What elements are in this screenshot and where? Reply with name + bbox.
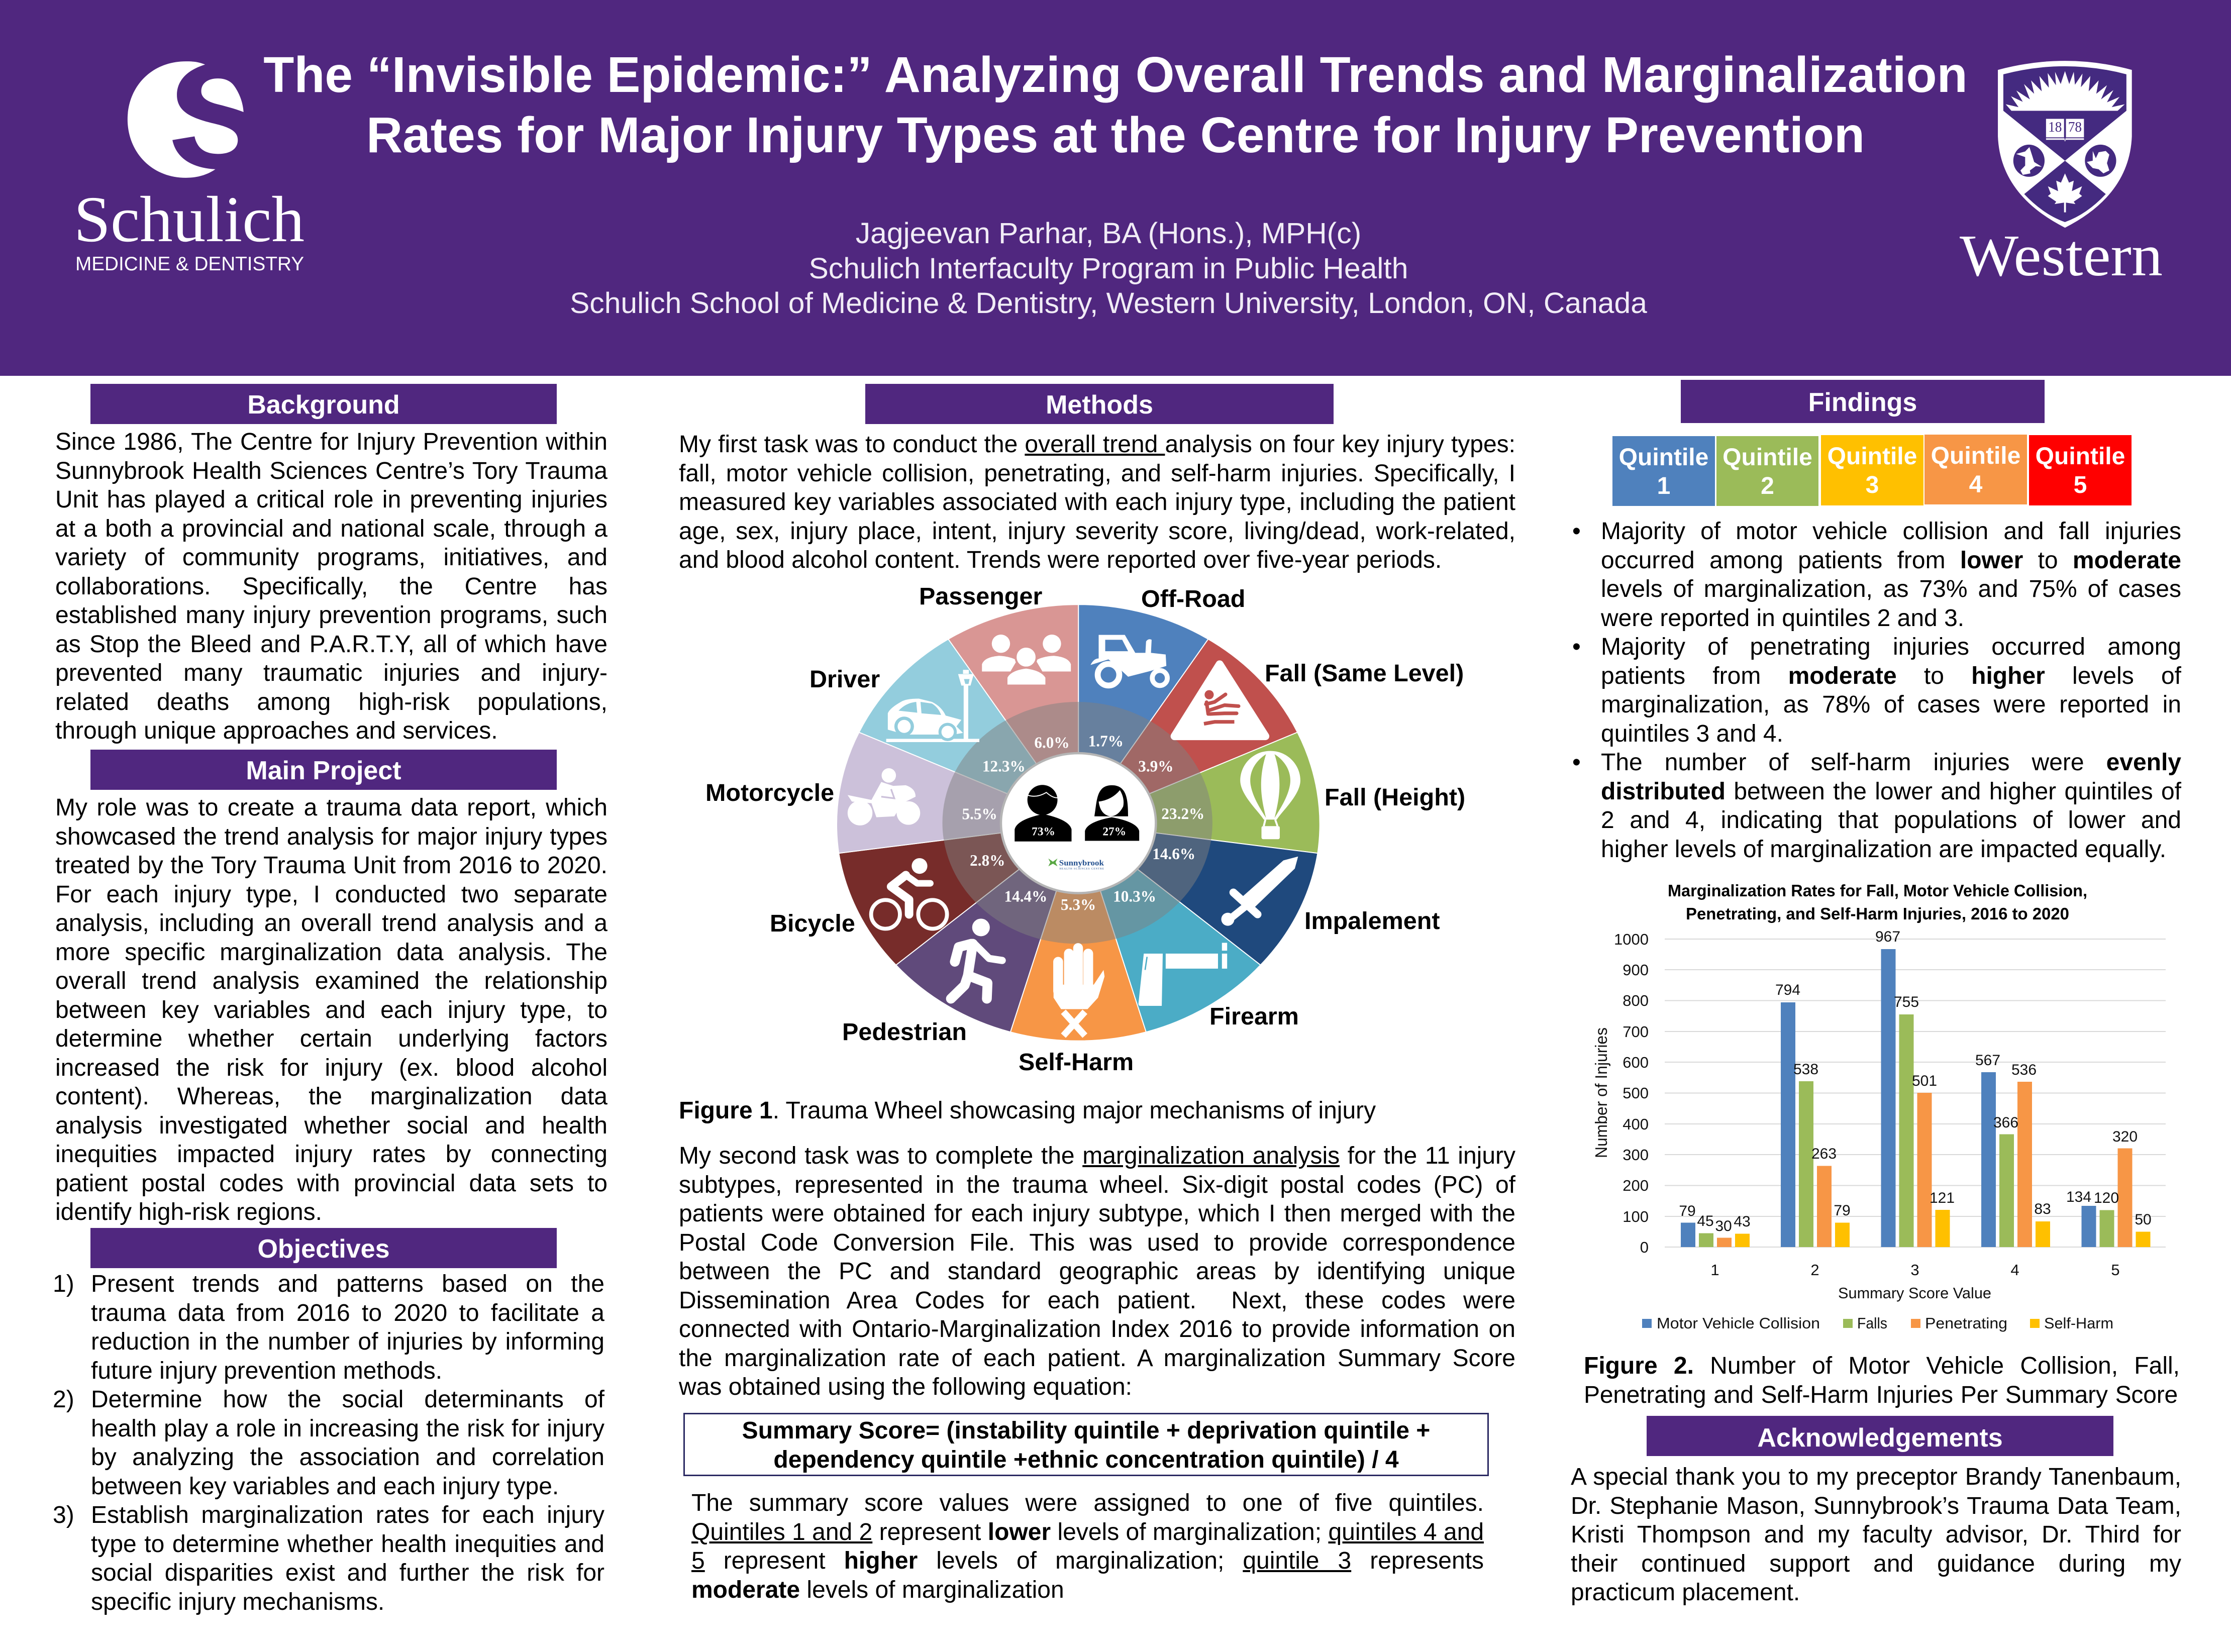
text: numbered objectives: health play a role in increasing the risk for injury	[91, 1415, 604, 1442]
chart title: Marginalization Rates for Fall, Motor Vehicle Collision,	[1668, 881, 2087, 900]
text: overall trend analysis paragraph: fall, motor vehicle collision, penetrating, and self-harm injuries. Specifically, I	[679, 460, 1515, 486]
icon: cyclist	[871, 858, 947, 929]
y axis title: Number of Injuries	[1592, 1027, 1610, 1158]
icon: pedestrian	[951, 918, 1002, 999]
bar value labels: 79	[1834, 1202, 1851, 1219]
text: acknowledgements paragraph: Kristi Thompson and my faculty advisor, Dr. Third for	[1571, 1521, 2181, 1548]
author and affiliation: Schulich School of Medicine & Dentistry, Western University, London, ON, Canada	[570, 287, 1647, 320]
bar value labels: 120	[2094, 1190, 2119, 1206]
text: 2)	[53, 1386, 74, 1413]
quintile 4: Quintile	[1931, 443, 2020, 469]
bar value labels: 43	[1734, 1213, 1751, 1230]
chart title	[1668, 881, 2087, 923]
bar value labels: 50	[2135, 1211, 2152, 1228]
text: acknowledgements paragraph: their continued support and guidance during my	[1571, 1551, 2181, 1577]
chart: marginalization rates bar chart	[1558, 864, 2191, 1347]
text: background paragraph: as Stop the Bleed and P.A.R.T.Y, all of which have	[55, 631, 607, 657]
text: numbered objectives: type to determine whether health inequities and	[91, 1530, 604, 1558]
text: background paragraph: Unit has played a critical role in preventing injuries	[55, 486, 607, 513]
logo: Western University shield and wordmark: 78	[2068, 120, 2082, 135]
text: main project paragraph: identify high-risk regions.	[55, 1199, 322, 1225]
text: acknowledgements paragraph: Dr. Stephanie Mason, Sunnybrook’s Trauma Data Team,	[1571, 1492, 2181, 1519]
quintile 4	[1924, 435, 2027, 504]
text: overall trend analysis paragraph	[679, 431, 1515, 573]
text: background paragraph: collaborations. Specifically, the Centre has	[55, 573, 607, 600]
callout: summary score equation	[683, 1413, 1489, 1476]
logo: Schulich Medicine & Dentistry: Schulich	[74, 183, 305, 256]
text: main project paragraph: My role was to create a trauma data report, which	[55, 794, 607, 821]
text: quintile explanation: 5 represent higher levels of marginalization; quintile 3 represents	[691, 1547, 1484, 1574]
text: main project paragraph	[55, 794, 607, 1225]
wheel category labels: Motorcycle	[705, 779, 834, 806]
chart: marginalization rates bar chart: 700	[1622, 1023, 1649, 1041]
text: 1)	[53, 1271, 74, 1297]
text: findings bullets: were reported in quintiles 2 and 3.	[1601, 605, 1964, 631]
chart: marginalization rates bar chart: 600	[1622, 1054, 1649, 1071]
heading: Background	[90, 384, 557, 424]
text: marginalization analysis paragraph: My second task was to complete the marginalization analysis for the 11 injury	[679, 1143, 1515, 1169]
wheel category labels: Off-Road	[1141, 585, 1245, 612]
text: findings bullets: marginalization, as 78% of cases were reported in	[1601, 691, 2181, 718]
header banner	[0, 0, 2231, 376]
callout: summary score equation: Summary Score= (instability quintile + deprivation quintile +	[742, 1417, 1430, 1444]
text: background paragraph: at a both a provincial and national scale, through a	[55, 515, 607, 542]
chart legend: Self-Harm	[2044, 1314, 2113, 1332]
inner ring percentages: 5.3%	[1061, 896, 1096, 913]
inner ring percentages: 3.9%	[1138, 758, 1173, 775]
text: findings bullets: 2 and 4, indicating that populations of lower and	[1601, 807, 2181, 834]
header banner: The “Invisible Epidemic:” Analyzing Overall Trends and Marginalization	[263, 47, 1968, 103]
x axis labels: 3	[1910, 1261, 1919, 1279]
heading: Objectives	[90, 1228, 557, 1268]
text: background paragraph: variety of community programs, initiatives, and	[55, 544, 607, 571]
chart legend	[1642, 1314, 2113, 1332]
text: quintile explanation	[691, 1489, 1484, 1604]
text: marginalization analysis paragraph: between the PC and standard geographic areas by identifying unique	[679, 1258, 1515, 1285]
bar value labels: 567	[1975, 1052, 2000, 1069]
text: numbered objectives: specific injury mechanisms.	[91, 1589, 384, 1615]
text: findings bullets: levels of marginalization, as 73% and 75% of cases	[1601, 576, 2181, 602]
text: background paragraph: through unique approaches and services.	[55, 717, 498, 744]
quintile 1: 1	[1657, 473, 1670, 499]
bar value labels: 134	[2066, 1189, 2091, 1205]
bar value labels: 45	[1697, 1213, 1714, 1229]
heading: Acknowledgements: Acknowledgements	[1757, 1423, 2003, 1453]
heading: Methods	[865, 384, 1334, 424]
author and affiliation: Jagjeevan Parhar, BA (Hons.), MPH(c)	[856, 217, 1361, 250]
text: numbered objectives: between key variables and each injury type.	[91, 1473, 559, 1499]
text: 3)	[53, 1502, 74, 1528]
wheel category labels: Fall (Height)	[1325, 784, 1465, 811]
text: marginalization analysis paragraph: was obtained using the following equation:	[679, 1374, 1132, 1400]
chart: marginalization rates bar chart: 1000	[1614, 931, 1649, 948]
bar value labels: 967	[1875, 928, 1900, 945]
text: numbered objectives	[53, 1271, 605, 1615]
inner ring percentages: 14.4%	[1004, 888, 1047, 905]
caption: figure 2: Penetrating and Self-Harm Injuries Per Summary Score	[1584, 1382, 2178, 1408]
logo: Western University shield and wordmark	[1960, 61, 2163, 288]
wheel segments	[837, 604, 1320, 1041]
chart: marginalization rates bar chart: 0	[1640, 1238, 1649, 1256]
quintile 3	[1821, 435, 1923, 505]
chart: trauma wheel	[705, 583, 1465, 1076]
heading: Background: Background	[247, 390, 400, 420]
text: main project paragraph: increased the risk for injury (ex. blood alcohol	[55, 1054, 607, 1081]
centre circle with male and female shares	[1001, 753, 1156, 893]
icon: sword	[1221, 857, 1298, 926]
heading: Main Project	[90, 750, 557, 790]
chart: marginalization rates bar chart: 500	[1622, 1084, 1649, 1102]
icon: wet floor fall sign	[1174, 664, 1265, 736]
centre circle with male and female shares: HEALTH SCIENCES CENTRE	[1059, 868, 1104, 871]
text: findings bullets: higher levels of marginalization are impacted equally.	[1601, 836, 2166, 862]
text: findings bullets: Majority of motor vehicle collision and fall injuries	[1601, 518, 2181, 545]
text: numbered objectives: Establish marginalization rates for each injury	[91, 1502, 604, 1528]
text: acknowledgements paragraph: practicum placement.	[1571, 1579, 1800, 1606]
inner ring percentages: 10.3%	[1113, 888, 1156, 905]
inner translucent ring	[943, 702, 1212, 944]
bar value labels: 794	[1775, 982, 1800, 998]
icon: raised hand with cross	[1054, 948, 1104, 1036]
text: main project paragraph: analysis, including an overall trend analysis and a	[55, 910, 607, 937]
wheel category labels: Fall (Same Level)	[1265, 660, 1464, 687]
chart legend: Motor Vehicle Collision	[1657, 1314, 1820, 1332]
heading: Methods: Methods	[1046, 390, 1153, 420]
text: overall trend analysis paragraph: and blood alcohol content. Trends were reported over five-year periods.	[679, 547, 1442, 573]
centre circle with male and female shares: Sunnybrook	[1059, 858, 1104, 867]
text: marginalization analysis paragraph: connected with Ontario-Marginalization Index 2016 to provide information on	[679, 1316, 1515, 1343]
quintile 3: 3	[1866, 472, 1879, 498]
bars	[1681, 949, 2151, 1247]
x axis labels	[1710, 1261, 2120, 1279]
bar value labels: 320	[2112, 1128, 2138, 1145]
bar value labels: 755	[1894, 994, 1919, 1010]
quintile 1: Quintile	[1619, 444, 1708, 471]
chart legend: Falls	[1857, 1314, 1887, 1332]
bar value labels: 538	[1793, 1061, 1818, 1078]
text: quintile explanation: moderate levels of marginalization	[691, 1577, 1064, 1603]
quintile 5: 5	[2074, 472, 2087, 498]
caption: figure 2: Figure 2. Number of Motor Vehicle Collision, Fall,	[1584, 1353, 2180, 1379]
text: •	[1572, 749, 1581, 776]
chart legend: Penetrating	[1925, 1314, 2007, 1332]
heading: Acknowledgements	[1647, 1416, 2113, 1456]
quintile 2: Quintile	[1722, 444, 1812, 471]
x axis labels: 5	[2111, 1261, 2120, 1279]
quintile 2	[1716, 436, 1818, 506]
text: background paragraph: related deaths among high-risk populations,	[55, 688, 607, 715]
text: findings bullets: patients from moderate to higher levels of	[1601, 662, 2181, 689]
chart: marginalization rates bar chart: 200	[1622, 1177, 1649, 1194]
wheel category labels: Firearm	[1209, 1003, 1299, 1030]
text: numbered objectives: Present trends and patterns based on the	[91, 1271, 604, 1297]
text: main project paragraph: For each injury type, I conducted two separate	[55, 881, 607, 907]
icon: firearm	[1139, 943, 1227, 1006]
text: main project paragraph: treated by the Tory Trauma Unit from 2016 to 2020.	[55, 852, 607, 879]
text: overall trend analysis paragraph: My first task was to conduct the overall trend analysis on four key injury types:	[679, 431, 1515, 458]
inner ring percentages: 14.6%	[1152, 845, 1195, 863]
callout: summary score equation: dependency quintile +ethnic concentration quintile) / 4	[773, 1446, 1399, 1473]
inner ring percentages: 12.3%	[982, 758, 1026, 775]
inner ring percentages: 23.2%	[1161, 805, 1204, 822]
bar value labels: 121	[1930, 1190, 1955, 1206]
text: main project paragraph: overall trend analysis examined the relationship	[55, 968, 607, 994]
text: numbered objectives: social disparities exist and further the risk for	[91, 1560, 604, 1586]
quintile 5: Quintile	[2036, 443, 2125, 470]
text: •	[1572, 634, 1581, 660]
quintile 2: 2	[1761, 473, 1774, 499]
caption: figure 1: Figure 1. Trauma Wheel showcasing major mechanisms of injury	[679, 1097, 1376, 1124]
legend: quintile colour boxes	[1612, 435, 2132, 506]
text: numbered objectives: by analyzing the association and correlation	[91, 1444, 604, 1471]
text: main project paragraph: analysis investigated whether social and health	[55, 1112, 607, 1139]
wheel category labels	[705, 583, 1465, 1076]
wheel category labels: Self-Harm	[1019, 1049, 1134, 1076]
text: acknowledgements paragraph: A special thank you to my preceptor Brandy Tanenbaum,	[1571, 1464, 2181, 1490]
chart: marginalization rates bar chart: 400	[1622, 1115, 1649, 1133]
text: findings bullets: occurred among patients from lower to moderate	[1601, 547, 2181, 574]
heading: Findings	[1681, 380, 2045, 423]
chart: marginalization rates bar chart: 300	[1622, 1146, 1649, 1164]
quintile 4: 4	[1969, 471, 1982, 498]
quintile 1	[1612, 436, 1715, 506]
bar value labels: 536	[2011, 1062, 2037, 1078]
text: marginalization analysis paragraph: the marginalization rate of each patient. A marginalization Summary Score	[679, 1345, 1515, 1372]
text: main project paragraph: more specific marginalization data analysis. The	[55, 939, 607, 966]
text: main project paragraph: patient postal codes with provincial data sets to	[55, 1170, 607, 1197]
bar value labels: 83	[2034, 1201, 2051, 1217]
text: background paragraph	[55, 429, 607, 744]
x axis title: Summary Score Value	[1838, 1284, 1991, 1302]
icon: tractor	[1090, 635, 1167, 685]
heading: Objectives: Objectives	[257, 1234, 390, 1264]
caption: figure 2	[1584, 1352, 2180, 1409]
text: main project paragraph: content). Whereas, the marginalization data	[55, 1083, 607, 1110]
text: numbered objectives: Determine how the social determinants of	[91, 1386, 604, 1413]
wheel category labels: Pedestrian	[842, 1018, 967, 1046]
x axis labels: 1	[1710, 1261, 1719, 1279]
text: background paragraph: Sunnybrook Health Sciences Centre’s Tory Trauma	[55, 457, 607, 484]
icon: motorcycle rider	[848, 768, 920, 825]
inner ring percentages: 6.0%	[1034, 734, 1070, 752]
icon: group of passengers	[982, 635, 1071, 685]
text: findings bullets: quintiles 3 and 4.	[1601, 720, 1783, 747]
text: marginalization analysis paragraph: Dissemination Area Codes for each patient. Next, these codes were	[679, 1287, 1515, 1313]
logo: Schulich Medicine & Dentistry	[74, 61, 305, 275]
logo: Western University shield and wordmark: Western	[1960, 223, 2163, 288]
poster title	[263, 47, 1968, 163]
bar value labels: 30	[1715, 1218, 1732, 1234]
text: background paragraph: prevented many traumatic injuries and injury-	[55, 660, 607, 686]
text: marginalization analysis paragraph	[679, 1142, 1515, 1402]
author and affiliation	[570, 217, 1647, 320]
x axis labels: 2	[1810, 1261, 1819, 1279]
text: acknowledgements paragraph	[1571, 1463, 2181, 1607]
text: main project paragraph: determine whether certain underlying factors	[55, 1025, 607, 1052]
centre circle with male and female shares: 27%	[1102, 825, 1126, 838]
text: findings bullets: The number of self-harm injuries were evenly	[1601, 749, 2181, 776]
chart: marginalization rates bar chart: 800	[1622, 992, 1649, 1009]
icon: car crashed into lamp post	[886, 670, 979, 742]
text: numbered objectives: future injury prevention methods.	[91, 1358, 442, 1384]
text: main project paragraph: inequities impacted injury rates by connecting	[55, 1141, 607, 1168]
inner ring percentages	[962, 732, 1204, 913]
text: main project paragraph: between key variables and each injury type, to	[55, 997, 607, 1023]
text: •	[1572, 518, 1581, 545]
text: findings bullets: distributed between the lower and higher quintiles of	[1601, 778, 2181, 805]
gridlines and y axis ticks	[1665, 939, 2166, 1247]
text: marginalization analysis paragraph: Postal Code Conversion File. This was used to provide correspondence	[679, 1229, 1515, 1256]
text: marginalization analysis paragraph: subtypes, represented in the trauma wheel. Six-digit postal codes (PC) of	[679, 1172, 1515, 1198]
text: quintile explanation: Quintiles 1 and 2 represent lower levels of marginalization; quintiles 4 and	[691, 1518, 1484, 1545]
text: overall trend analysis paragraph: age, sex, injury place, intent, injury severity score, living/dead, work-related,	[679, 518, 1515, 545]
wheel category labels: Driver	[809, 666, 880, 693]
quintile 5	[2029, 435, 2132, 505]
text: numbered objectives: trauma data from 2016 to 2020 to facilitate a	[91, 1299, 604, 1326]
chart: marginalization rates bar chart: 100	[1622, 1208, 1649, 1225]
text: quintile explanation: The summary score values were assigned to one of five quintiles.	[691, 1490, 1484, 1516]
text: findings bullets: Majority of penetrating injuries occurred among	[1601, 634, 2181, 660]
text: marginalization analysis paragraph: patients were obtained for each injury subtype, which I then merged with the	[679, 1200, 1515, 1227]
bar value labels	[1679, 928, 2152, 1234]
icon: hot air balloon	[1240, 751, 1300, 839]
inner ring percentages: 5.5%	[962, 805, 997, 823]
quintile 3: Quintile	[1828, 443, 1917, 470]
wheel category labels: Bicycle	[770, 910, 855, 937]
text: main project paragraph: showcased the trend analysis for major injury types	[55, 823, 607, 850]
bar value labels: 263	[1811, 1146, 1837, 1162]
inner ring percentages: 2.8%	[970, 852, 1005, 869]
logo: Schulich Medicine & Dentistry: MEDICINE & DENTISTRY	[75, 253, 304, 275]
chart: marginalization rates bar chart: 900	[1622, 961, 1649, 979]
heading: Main Project: Main Project	[246, 756, 401, 785]
bar value labels: 79	[1679, 1203, 1696, 1219]
header banner: Rates for Major Injury Types at the Centre for Injury Prevention	[366, 107, 1865, 163]
centre circle with male and female shares: 73%	[1032, 825, 1055, 838]
text: background paragraph: Since 1986, The Centre for Injury Prevention within	[55, 429, 607, 455]
x axis labels: 4	[2010, 1261, 2019, 1279]
bar value labels: 501	[1912, 1073, 1937, 1089]
logo: Western University shield and wordmark: 18	[2048, 120, 2062, 135]
author and affiliation: Schulich Interfaculty Program in Public Health	[809, 252, 1408, 284]
text: overall trend analysis paragraph: measured key variables associated with each injury type, including the patient	[679, 489, 1515, 515]
bar value labels: 366	[1993, 1114, 2018, 1131]
text: findings bullets	[1601, 517, 2181, 864]
wheel category labels: Impalement	[1304, 907, 1440, 935]
heading: Findings: Findings	[1808, 388, 1917, 417]
text: numbered objectives: reduction in the number of injuries by informing	[91, 1328, 604, 1355]
wheel category labels: Passenger	[919, 583, 1042, 610]
text: background paragraph: established many injury prevention programs, such	[55, 602, 607, 629]
inner ring percentages: 1.7%	[1088, 732, 1124, 750]
chart title: Penetrating, and Self-Harm Injuries, 2016 to 2020	[1686, 904, 2069, 923]
